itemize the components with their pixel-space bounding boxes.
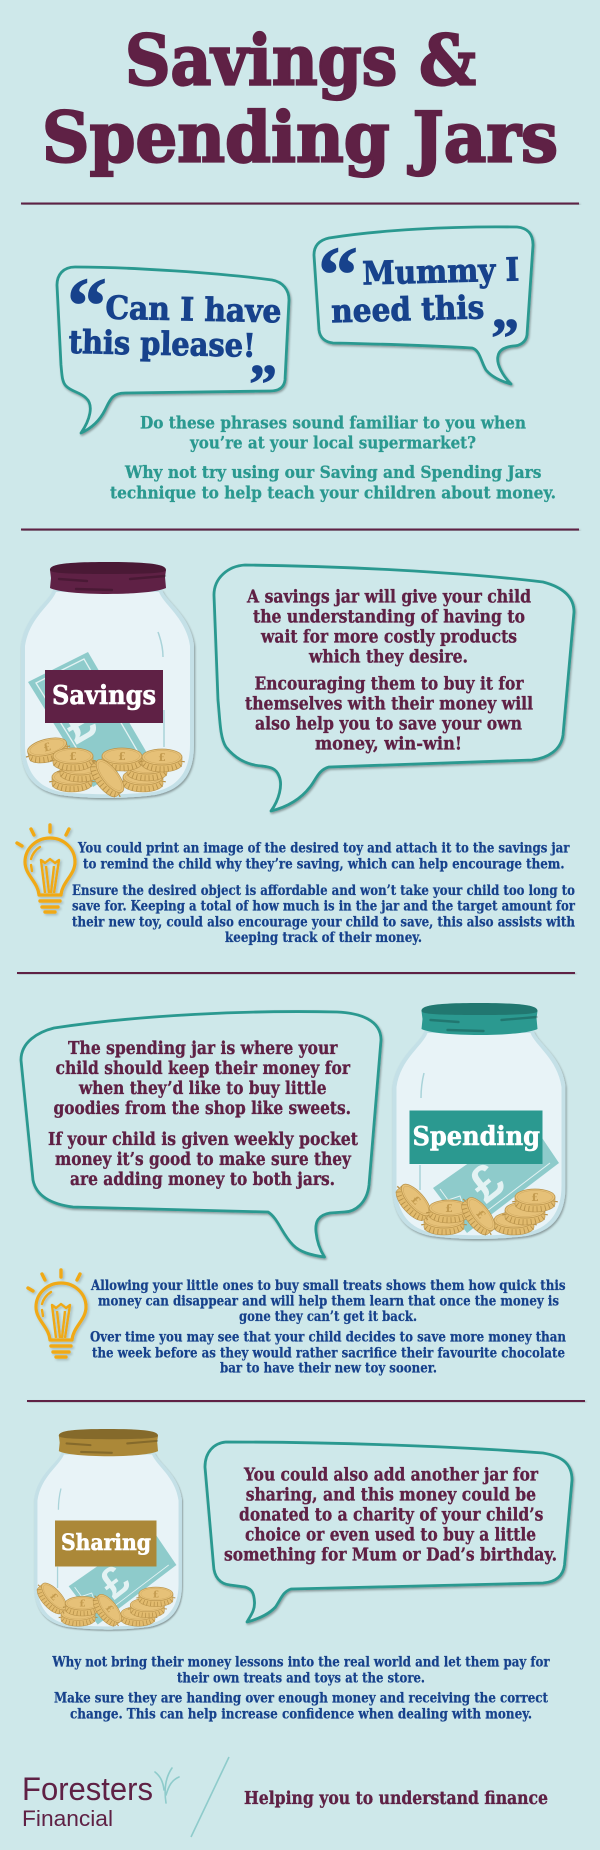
savings explanation text bbox=[245, 588, 533, 754]
savings tip text: keeping track of their money. bbox=[225, 930, 422, 946]
closing text: their own treats and toys at the store. bbox=[177, 1670, 425, 1686]
icon: light bulb bbox=[28, 1270, 86, 1357]
icon: plume bbox=[155, 1768, 179, 1803]
coins bbox=[26, 734, 182, 801]
savings explanation text: A savings jar will give your child bbox=[246, 588, 531, 608]
coins: £ bbox=[531, 1191, 539, 1204]
coins: £ bbox=[158, 751, 166, 764]
closing text bbox=[52, 1655, 550, 1722]
sharing explanation text: something for Mum or Dad’s birthday. bbox=[224, 1546, 557, 1566]
sharing label bbox=[55, 1520, 156, 1566]
savings label bbox=[45, 670, 163, 723]
banknote: £ bbox=[53, 692, 106, 754]
sharing explanation text: donated to a charity of your child’s bbox=[239, 1506, 544, 1526]
speech bubble: Can I have this please: this please! bbox=[68, 323, 256, 365]
speech bubble: Can I have this please: Can I have bbox=[105, 289, 282, 330]
spending tip text: gone they can’t get it back. bbox=[239, 1309, 417, 1325]
speech bubble: Mummy I need this bbox=[314, 227, 533, 384]
intro text: Why not try using our Saving and Spending Jars bbox=[124, 463, 542, 483]
banknote bbox=[433, 1120, 559, 1233]
speech bubble: Mummy I need this: ” bbox=[491, 308, 519, 370]
spending explanation text: goodies from the shop like sweets. bbox=[54, 1099, 351, 1119]
spending jar bbox=[391, 1003, 566, 1239]
spending tip text bbox=[90, 1278, 566, 1377]
coins bbox=[33, 1579, 173, 1630]
coins: £ bbox=[47, 1591, 60, 1603]
coins: £ bbox=[69, 750, 77, 763]
logo: Foresters Financial: Foresters bbox=[22, 1771, 153, 1807]
sharing label: Sharing bbox=[61, 1530, 151, 1556]
spending explanation text bbox=[48, 1039, 358, 1190]
savings explanation text: the understanding of having to bbox=[253, 608, 525, 628]
intro text: technique to help teach your children about money. bbox=[110, 484, 556, 504]
spending explanation text: when they’d like to buy little bbox=[78, 1079, 326, 1099]
banknote: £ bbox=[91, 1556, 139, 1608]
tagline: Helping you to understand finance bbox=[244, 1789, 548, 1809]
coins: £ bbox=[103, 1603, 115, 1615]
intro text: you’re at your local supermarket? bbox=[189, 434, 476, 454]
speech bubble: Can I have this please: ” bbox=[249, 354, 277, 416]
sharing explanation text bbox=[224, 1466, 557, 1566]
banknote: £ bbox=[458, 1152, 515, 1213]
title: Spending Jars bbox=[42, 98, 558, 178]
coins: £ bbox=[79, 1599, 86, 1610]
logo: Foresters Financial bbox=[22, 1768, 179, 1831]
sharing explanation text: sharing, and this money could be bbox=[246, 1486, 536, 1506]
savings explanation text: which they desire. bbox=[308, 648, 468, 668]
sharing jar bbox=[33, 1429, 182, 1630]
spending tip text: bar to have their new toy sooner. bbox=[220, 1361, 437, 1377]
spending explanation text: If your child is given weekly pocket bbox=[48, 1130, 358, 1150]
logo: Foresters Financial: Financial bbox=[22, 1806, 113, 1831]
coins: £ bbox=[473, 1207, 488, 1221]
title: Savings & bbox=[125, 20, 476, 102]
speech bubble: Mummy I need this: Mummy I bbox=[362, 250, 520, 292]
intro text: Do these phrases sound familiar to you when bbox=[140, 414, 526, 434]
coins: £ bbox=[408, 1193, 423, 1208]
banknote bbox=[69, 1528, 176, 1624]
spending explanation text: The spending jar is where your bbox=[68, 1039, 338, 1059]
sharing explanation text: You could also add another jar for bbox=[243, 1466, 539, 1486]
sharing explanation text: choice or even used to buy a little bbox=[245, 1526, 536, 1546]
title bbox=[42, 20, 558, 178]
savings explanation text: Encouraging them to buy it for bbox=[254, 674, 524, 694]
savings explanation text: money, win-win! bbox=[315, 734, 462, 754]
savings explanation text: wait for more costly products bbox=[260, 628, 517, 648]
savings label: Savings bbox=[52, 681, 156, 711]
speech bubble: savings jar explanation bbox=[214, 565, 574, 811]
speech bubble: Can I have this please bbox=[57, 263, 289, 433]
spending explanation text: money it’s good to make sure they bbox=[55, 1150, 352, 1170]
speech bubble: Mummy I need this: need this bbox=[331, 288, 485, 330]
speech bubble: sharing jar explanation bbox=[205, 1442, 572, 1622]
spending label: Spending bbox=[412, 1122, 540, 1152]
divider slash bbox=[191, 1757, 229, 1837]
savings tip text bbox=[72, 841, 576, 946]
spending explanation text: child should keep their money for bbox=[56, 1059, 351, 1079]
coins: £ bbox=[118, 750, 126, 763]
closing text: change. This can help increase confidence when dealing with money. bbox=[70, 1706, 532, 1722]
savings explanation text: also help you to save your own bbox=[255, 714, 522, 734]
savings jar bbox=[21, 562, 194, 801]
spending explanation text: are adding money to both jars. bbox=[70, 1170, 335, 1190]
spending label bbox=[410, 1110, 542, 1164]
closing text: Make sure they are handing over enough money and receiving the correct bbox=[54, 1691, 549, 1707]
icon: light bulb bbox=[17, 825, 75, 912]
speech bubble: Can I have this please: “ bbox=[67, 263, 107, 351]
savings explanation text: themselves with their money will bbox=[245, 694, 533, 714]
intro text bbox=[110, 414, 556, 504]
banknote bbox=[28, 652, 147, 787]
coins: £ bbox=[42, 740, 52, 755]
coins: £ bbox=[445, 1202, 453, 1215]
coins bbox=[391, 1180, 555, 1239]
speech bubble: Mummy I need this: “ bbox=[318, 232, 358, 320]
speech bubble: spending jar explanation bbox=[21, 1012, 381, 1257]
coins: £ bbox=[153, 1589, 159, 1600]
